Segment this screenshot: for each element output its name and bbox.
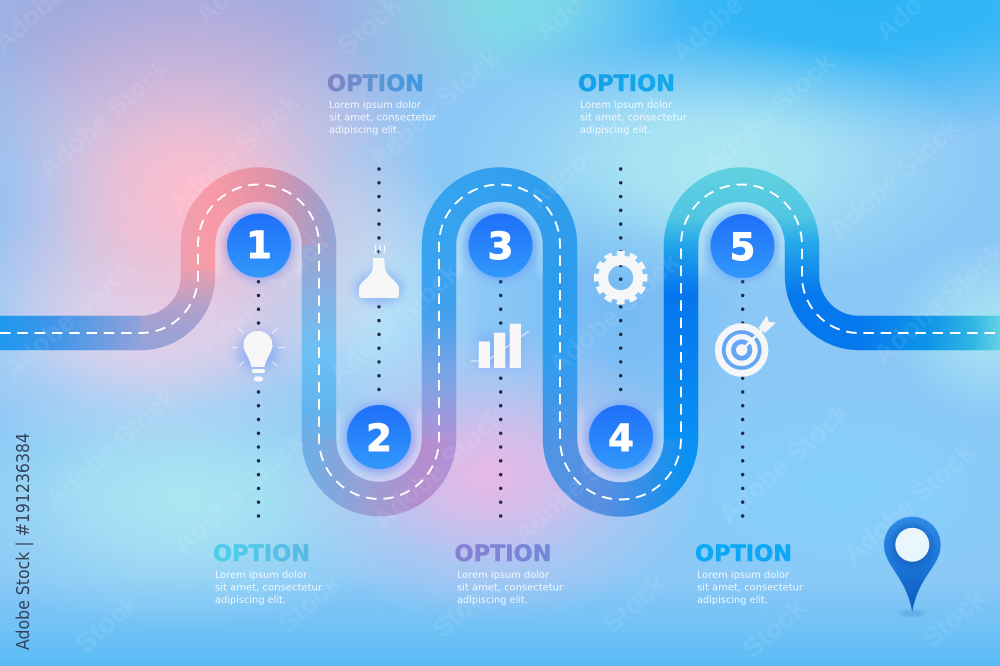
watermarks: Stock — [917, 582, 992, 654]
icon: target with arrow — [718, 316, 776, 373]
watermarks: Adobe Stock — [163, 86, 306, 220]
step 1 marker: 1 — [246, 224, 272, 267]
winding road — [0, 184, 1000, 499]
watermarks: Stock — [272, 567, 347, 639]
step 5 marker: 5 — [730, 226, 755, 269]
watermarks: Adobe Stock — [838, 436, 981, 570]
text block: option 1 — [213, 542, 322, 606]
text block: option 4: Lorem ipsum dolor — [580, 100, 672, 111]
watermarks: Stock — [427, 572, 502, 644]
watermarks: Adobe Stock — [323, 256, 466, 390]
text block: option 3: Lorem ipsum dolor — [457, 570, 549, 581]
stock image id caption: Adobe Stock | #191236384 — [13, 433, 34, 650]
icon: map pin — [884, 517, 941, 615]
text block: option 2: adipiscing elit. — [329, 125, 400, 136]
road centre dashes — [0, 184, 1000, 499]
icon: bar chart — [471, 324, 529, 368]
text block: option 2: sit amet, consectetur — [329, 112, 436, 124]
text block: option 1: OPTION — [213, 542, 310, 567]
text block: option 3 — [454, 542, 563, 606]
text block: option 3: sit amet, consectetur — [457, 582, 563, 594]
watermarks: Adobe Stock — [508, 416, 651, 550]
watermarks: Adobe Stock — [823, 111, 966, 245]
watermarks: Adobe Stock — [698, 46, 841, 180]
watermarks: Adobe Stock — [713, 396, 856, 530]
step 5 marker — [710, 214, 776, 280]
watermarks: Adobe Stock — [368, 401, 511, 535]
watermarks: Adobe Stock — [168, 426, 311, 560]
text block: option 5: sit amet, consectetur — [697, 582, 803, 594]
text block: option 5: adipiscing elit. — [697, 595, 768, 606]
soft light inside road bends — [217, 203, 784, 481]
dotted connector lines — [258, 169, 743, 518]
text block: option 4 — [578, 72, 687, 136]
step 3 marker — [468, 213, 534, 279]
watermarks: Adobe Stock — [363, 41, 506, 175]
text block: option 3: OPTION — [454, 542, 552, 567]
step 4 marker: 4 — [608, 417, 634, 460]
text block: option 1: Lorem ipsum dolor — [215, 570, 307, 581]
watermarks: Stock — [737, 592, 812, 664]
step 2 marker: 2 — [366, 417, 392, 460]
text block: option 4: OPTION — [578, 72, 675, 97]
text block: option 2: Lorem ipsum dolor — [329, 100, 421, 111]
text block: option 1: adipiscing elit. — [215, 595, 286, 606]
watermarks: Adobe Stock — [33, 51, 176, 185]
text block: option 5: Lorem ipsum dolor — [697, 570, 789, 581]
step 4 marker — [588, 404, 654, 470]
text block: option 1: sit amet, consectetur — [215, 582, 322, 594]
icon: gear — [596, 254, 645, 302]
watermarks: Adobe Stock — [193, 226, 336, 360]
text block: option 5: OPTION — [695, 542, 792, 567]
watermarks: Stock — [597, 567, 672, 639]
watermarks: Adobe Stock — [40, 381, 183, 515]
step 1 marker — [226, 213, 292, 279]
text block: option 3: adipiscing elit. — [457, 595, 528, 606]
watermarks: Adobe Stock — [523, 81, 666, 215]
text block: option 2 — [327, 72, 436, 136]
step 2 marker — [346, 404, 412, 470]
icon: flask lamp — [355, 245, 403, 304]
watermarks: Adobe Stock — [543, 246, 686, 380]
text block: option 4: sit amet, consectetur — [580, 112, 687, 124]
step 3 marker: 3 — [488, 225, 513, 268]
watermarks: Adobe Stock — [0, 251, 141, 385]
text block: option 4: adipiscing elit. — [580, 125, 651, 136]
icon: light bulb — [232, 328, 285, 382]
watermarks: Stock — [70, 587, 145, 659]
text block: option 2: OPTION — [327, 72, 424, 97]
text block: option 5 — [695, 542, 803, 606]
